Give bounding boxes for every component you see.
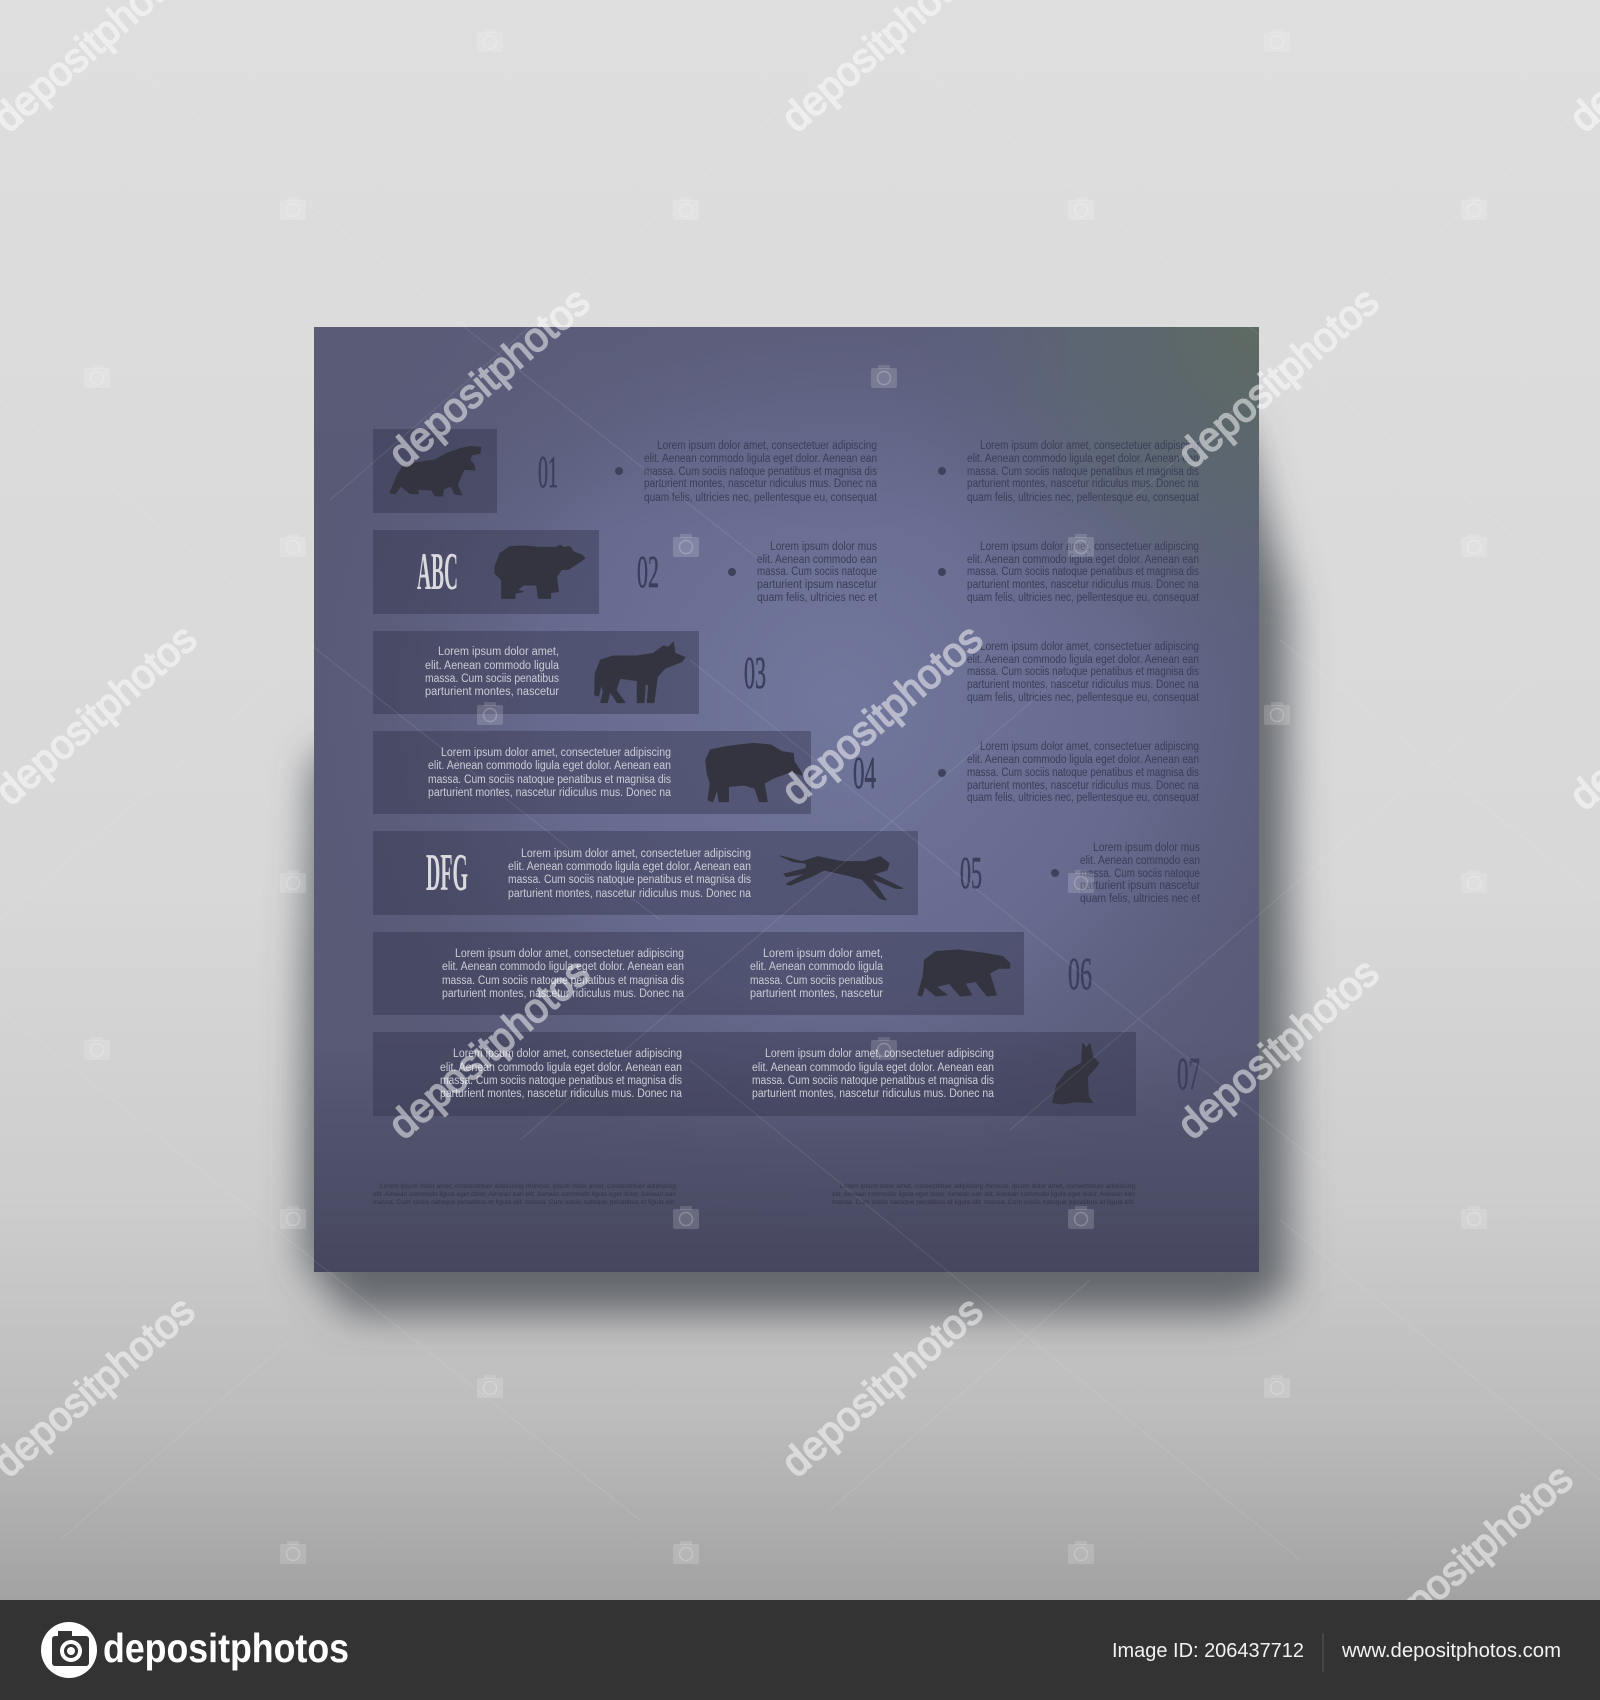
text block: elit. Aenean commodo ligula eget dolor. Aenean ean (644, 453, 877, 465)
text block (752, 1048, 995, 1100)
icon: buffalo (706, 743, 802, 802)
panel: row 01: 01 (538, 446, 558, 497)
text block: elit. Aenean commodo ligula eget dolor. Aenean ean (752, 1062, 994, 1074)
watermark text: depositphotos (1168, 949, 1387, 1148)
text block: massa. Cum sociis natoque penatibus et magnisa dis (967, 666, 1199, 678)
text block (967, 440, 1200, 504)
text block: parturient montes, nascetur ridiculus mus. Donec na (644, 478, 878, 490)
text block: massa. Cum sociis natoque penatibus et magnisa dis (752, 1075, 994, 1087)
text block: quam felis, ultricies nec, pellentesque eu, consequat (967, 792, 1200, 804)
icon: polar bear (918, 950, 1010, 996)
text block: Lorem ipsum dolor mus (770, 541, 877, 553)
text block (440, 1048, 683, 1100)
text block: massa. Cum sociis penatibus (425, 673, 559, 685)
icon: bear (495, 545, 585, 598)
icon: wolf (595, 642, 685, 703)
panel: row 02: 02 (637, 546, 659, 597)
panel: row 01 (373, 429, 1200, 513)
panel: row 05: 05 (960, 847, 982, 898)
site url: www.depositphotos.com (1341, 1640, 1561, 1662)
text block: quam felis, ultricies nec, pellentesque eu, consequat (967, 592, 1200, 604)
text block: elit. Aenean commodo ligula eget dolor. Aenean ean (440, 1062, 682, 1074)
text block: Lorem ipsum dolor amet, consectetuer adipiscing (453, 1048, 682, 1060)
text block: parturient montes, nascetur ridiculus mus. Donec na (428, 787, 672, 799)
bar 03 (373, 631, 699, 714)
text block: massa. Cum sociis natoque penatibus et magnisa dis (967, 466, 1199, 478)
text block: Lorem ipsum dolor amet, consectetuer adipiscing (980, 541, 1199, 553)
panel: row 04 (373, 731, 1200, 814)
watermark text: depositphotos (772, 615, 991, 814)
dot (1051, 869, 1059, 877)
text block: parturient montes, nascetur ridiculus mus. Donec na (967, 478, 1200, 490)
bar 07 (373, 1032, 1136, 1116)
icon: depositphotos logo (41, 1622, 97, 1678)
text block (428, 747, 672, 799)
text block: parturient montes, nascetur ridiculus mus. Donec na (752, 1088, 995, 1100)
text block: Lorem ipsum dolor amet, consectetuer adipiscing (455, 948, 684, 960)
watermark text: depositphotos (1168, 278, 1387, 477)
text block (442, 948, 685, 1000)
text block (967, 541, 1200, 604)
panel: row 07 (373, 1032, 1200, 1116)
dot (728, 568, 736, 576)
text block (425, 646, 560, 698)
logo wordmark: depositphotos (103, 1625, 349, 1671)
text block: parturient montes, nascetur (750, 988, 883, 1000)
text block: parturient ipsum nascetur (757, 579, 877, 591)
watermark text: depositphotos (772, 1287, 991, 1486)
text block: Lorem ipsum dolor amet, consectetuer adipiscing (521, 848, 751, 860)
text block: massa. Cum sociis natoque penatibus et magnisa dis (508, 874, 751, 886)
text block: quam felis, ultricies nec et (757, 592, 878, 604)
text block: parturient montes, nascetur (425, 686, 559, 698)
watermark camera icons (84, 29, 1487, 1564)
text block: Lorem ipsum dolor amet, consectetuer adipiscing (980, 641, 1199, 653)
text block: elit. Aenean commodo ligula eget dolor. Aenean ean (967, 554, 1199, 566)
image id: Image ID: 206437712 (1112, 1640, 1304, 1662)
footnote left (373, 1183, 676, 1206)
text block: massa. Cum sociis natoque penatibus et magnisa dis (967, 566, 1199, 578)
text block: elit. Aenean commodo ligula eget dolor. Aenean ean (428, 760, 671, 772)
icon: cheetah (781, 856, 902, 900)
text block: elit. Aenean commodo ligula eget dolor. Aenean ean (967, 654, 1199, 666)
panel: infographic card (314, 327, 1259, 1272)
text block: parturient montes, nascetur ridiculus mus. Donec na (967, 579, 1200, 591)
text block (967, 641, 1200, 704)
text block: Lorem ipsum dolor amet, (438, 646, 559, 658)
text block: parturient montes, nascetur ridiculus mus. Donec na (442, 988, 685, 1000)
text block (750, 948, 884, 1000)
footnote right (832, 1183, 1135, 1206)
watermark text: depositphotos (1362, 1455, 1581, 1654)
text block: elit. Aenean commodo ligula eget dolor. Aenean ean (967, 453, 1199, 465)
text block: massa. Cum sociis penatibus (750, 975, 883, 987)
text block: massa. Cum sociis natoque penatibus et magnisa dis (967, 767, 1199, 779)
footnote left: massa. Cum sociis natoque penatibus et ligula elit. massa. Cum sociis natoque penatibus et ligula elit. (373, 1199, 676, 1206)
text block: elit. Aenean commodo ean (1080, 855, 1200, 867)
text block: Lorem ipsum dolor amet, consectetuer adipiscing (980, 741, 1199, 753)
text block: parturient montes, nascetur ridiculus mus. Donec na (508, 888, 752, 900)
number 06: 06 (1068, 948, 1092, 999)
footnote right: elit. Aenean commodo ligula eget dolor. Aenean ean elit. Aenean commodo ligula eget dolor. Aenean ean (832, 1191, 1135, 1198)
bar 06 (373, 932, 1024, 1015)
panel: row 05 (373, 831, 1201, 915)
text block: parturient montes, nascetur ridiculus mus. Donec na (440, 1088, 683, 1100)
text block: elit. Aenean commodo ligula (425, 660, 560, 672)
panel: row 06 (373, 932, 1092, 1015)
text block: Lorem ipsum dolor amet, consectetuer adipiscing (657, 440, 877, 452)
text block: Lorem ipsum dolor amet, consectetuer adipiscing (765, 1048, 994, 1060)
bar 05 (373, 831, 918, 915)
footnote right: Lorem ipsum dolor amet, consectetuer adipiscing rhoncus. ipsum dolor amet, consectetuer adipiscing (840, 1183, 1135, 1190)
text block: elit. Aenean commodo ligula (750, 961, 884, 973)
text block: quam felis, ultricies nec, pellentesque eu, consequat (967, 492, 1200, 504)
text block: massa. Cum sociis natoque penatibus et magnisa dis (644, 466, 877, 478)
text block: elit. Aenean commodo ligula eget dolor. Aenean ean (508, 861, 751, 873)
icon: rabbit (1053, 1043, 1099, 1104)
dot (615, 467, 623, 475)
text block (1080, 842, 1201, 905)
text block: parturient montes, nascetur ridiculus mus. Donec na (967, 679, 1200, 691)
dot (938, 467, 946, 475)
dot (938, 568, 946, 576)
footnote right: massa. Cum sociis natoque penatibus et ligula elit. massa. Cum sociis natoque penatibus et ligula elit. (832, 1199, 1135, 1206)
text block: elit. Aenean commodo ligula eget dolor. Aenean ean (967, 754, 1199, 766)
bar 04 (373, 731, 811, 814)
text block: quam felis, ultricies nec et (1080, 893, 1201, 905)
text block (508, 848, 752, 900)
bar 01 (373, 429, 497, 513)
icon: hippo (390, 447, 481, 496)
panel: row 02 (373, 530, 1200, 614)
text block: Lorem ipsum dolor amet, consectetuer adipiscing (441, 747, 671, 759)
panel: row 02: ABC (417, 543, 458, 601)
number 07: 07 (1177, 1048, 1200, 1099)
text block: parturient montes, nascetur ridiculus mus. Donec na (967, 780, 1200, 792)
panel drop shadow (304, 420, 1290, 1314)
text block: parturient ipsum nascetur (1080, 880, 1200, 892)
bar 02 (373, 530, 599, 614)
text block: quam felis, ultricies nec, pellentesque eu, consequat (967, 692, 1200, 704)
text block (644, 440, 878, 504)
text block: massa. Cum sociis natoque (757, 566, 877, 578)
text block: quam felis, ultricies nec, pellentesque eu, consequat (644, 492, 878, 504)
text block: Lorem ipsum dolor amet, consectetuer adipiscing (980, 440, 1199, 452)
text block: massa. Cum sociis natoque penatibus et magnisa dis (442, 975, 684, 987)
footer bar (0, 1600, 1600, 1700)
text block: Lorem ipsum dolor amet, (763, 948, 883, 960)
text block (967, 741, 1200, 804)
text block: elit. Aenean commodo ligula eget dolor. Aenean ean (442, 961, 684, 973)
footnote left: Lorem ipsum dolor amet, consectetuer adipiscing rhoncus. ipsum dolor amet, consectetuer adipiscing (380, 1183, 676, 1190)
text block (757, 541, 878, 604)
number 04: 04 (853, 747, 876, 798)
panel: row 03 (373, 631, 1200, 714)
text block: Lorem ipsum dolor mus (1093, 842, 1200, 854)
text block: massa. Cum sociis natoque penatibus et magnisa dis (428, 774, 671, 786)
panel: row 03: 03 (744, 647, 766, 698)
text block: elit. Aenean commodo ean (757, 554, 877, 566)
footnote left: elit. Aenean commodo ligula eget dolor. Aenean ean elit. Aenean commodo ligula eget dolor. Aenean ean (373, 1191, 676, 1198)
watermark text: depositphotos (379, 278, 598, 477)
panel: row 05: DFG (426, 844, 468, 902)
dot (938, 769, 946, 777)
watermark text: depositphotos (379, 949, 598, 1148)
text block: massa. Cum sociis natoque (1080, 868, 1200, 880)
text block: massa. Cum sociis natoque penatibus et magnisa dis (440, 1075, 682, 1087)
